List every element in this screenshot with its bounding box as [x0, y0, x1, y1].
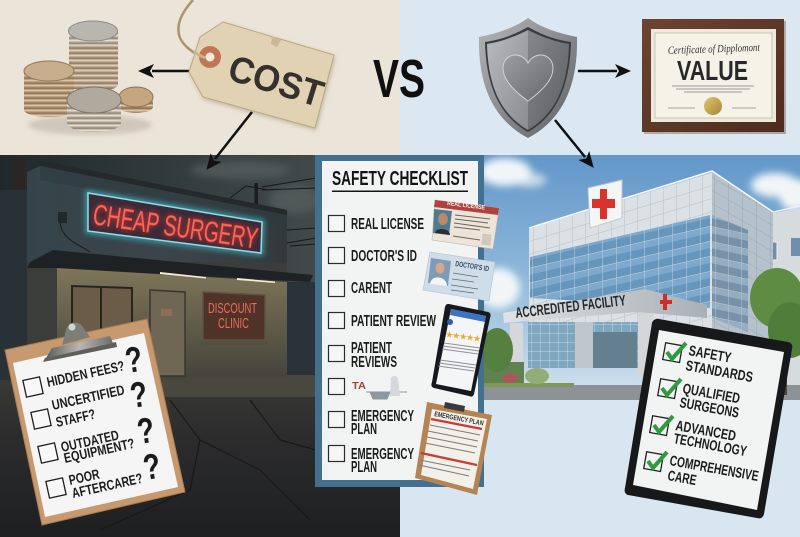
- checklist row: TA equipment icon: [328, 376, 407, 399]
- item: uncertified staff: STAFF?: [54, 406, 97, 430]
- item: safety standards: SAFETY: [687, 343, 733, 367]
- item: poor aftercare: [46, 445, 163, 501]
- item: uncertified staff: UNCERTIFIED: [50, 381, 126, 413]
- icon: shield with heart: [479, 18, 577, 138]
- neon sign: cheap surgery: [88, 193, 262, 255]
- item: hidden fees: [23, 338, 145, 397]
- checklist row: emergency plan one: EMERGENCY: [351, 408, 414, 425]
- arrow: cost to cheap surgery: [215, 112, 252, 159]
- checklist row: TA equipment icon: TA: [352, 381, 366, 392]
- neon sign: cheap surgery: CHEAP SURGERY: [91, 199, 260, 255]
- item: qualified surgeons: [658, 379, 741, 422]
- neon sign: discount clinic: [201, 292, 267, 345]
- heart: [503, 55, 553, 101]
- checklist row: emergency plan two: PLAN: [351, 459, 377, 476]
- window: [72, 286, 132, 352]
- item: outdated equipment: EQUIPMENT?: [62, 435, 136, 466]
- item: poor aftercare: ?: [140, 445, 163, 488]
- icon: real license card: REAL LICENSE: [447, 200, 486, 212]
- item: qualified surgeons: QUALIFIED: [681, 381, 741, 407]
- small stack: [119, 87, 153, 113]
- item: comprehensive care: CARE: [666, 468, 698, 489]
- icon: emergency plan clipboard: [415, 402, 492, 495]
- item: poor aftercare: AFTERCARE?: [70, 470, 144, 501]
- icon: coin stacks: [24, 21, 153, 135]
- checklist row: doctor's ID: DOCTOR'S ID: [351, 248, 417, 265]
- checklist row: emergency plan two: EMERGENCY: [351, 446, 414, 463]
- item: advanced technology: TECHNOLOGY: [672, 431, 748, 460]
- checklist title: SAFETY CHECKLIST: [332, 168, 468, 190]
- asphalt ground: [0, 375, 400, 537]
- clinic building: [0, 160, 316, 380]
- item: comprehensive care: COMPREHENSIVE: [668, 453, 760, 485]
- neon sign: discount clinic: DISCOUNT: [208, 300, 257, 317]
- red cross sign: [588, 180, 622, 228]
- checklist row: patient reviews: PATIENT: [351, 340, 392, 357]
- item: advanced technology: ADVANCED: [674, 418, 737, 445]
- icon: phone with reviews: [431, 304, 491, 397]
- hospital building: [529, 171, 800, 400]
- checklist row: real license: [328, 216, 424, 233]
- heading: VS: VS: [373, 49, 425, 109]
- entrance: [481, 268, 800, 400]
- arrow: shield to value: [578, 70, 617, 72]
- item: outdated equipment: [38, 409, 157, 466]
- neon sign: discount clinic: CLINIC: [218, 315, 249, 332]
- certificate: value: [642, 19, 786, 134]
- door: [150, 290, 185, 376]
- item: hidden fees: ?: [122, 338, 145, 381]
- item: qualified surgeons: SURGEONS: [678, 395, 740, 422]
- checklist row: patient review: PATIENT REVIEW: [351, 313, 436, 330]
- icon: phone with reviews: ★★★★★: [445, 329, 482, 344]
- item: safety standards: [663, 343, 754, 386]
- tall stack: [68, 21, 118, 92]
- checklist row: emergency plan two: [328, 446, 414, 476]
- neon sign: cheap surgery: CHEAP SURGERY: [91, 199, 260, 255]
- checklist row: carent: CARENT: [351, 280, 392, 297]
- clipboard: hidden risks: [5, 319, 185, 525]
- item: advanced technology: [650, 416, 748, 460]
- checklist title: [332, 168, 468, 192]
- item: safety standards: STANDARDS: [684, 358, 754, 386]
- accredited facility canopy: ACCREDITED FACILITY: [514, 292, 627, 322]
- left stack: [24, 61, 74, 117]
- panel: safety checklist: [315, 155, 484, 487]
- icon: emergency plan clipboard: EMERGENCY PLAN: [434, 411, 484, 428]
- icon: doctor's ID card: DOCTOR'S ID: [455, 259, 490, 273]
- checklist row: patient review: [328, 312, 436, 330]
- background: value band: [400, 0, 800, 156]
- icon: doctor's ID card: [423, 252, 495, 301]
- item: outdated equipment: OUTDATED: [59, 427, 120, 455]
- icon: price tag: [178, 0, 335, 130]
- panel: hospital scene: [476, 155, 800, 400]
- background: lower value area: [400, 395, 800, 537]
- clouds: [476, 158, 800, 308]
- clipboard clip: [43, 323, 117, 362]
- front stack: [67, 87, 121, 132]
- icon: price tag: COST: [224, 47, 329, 115]
- item: hidden fees: HIDDEN FEES?: [45, 357, 126, 390]
- checklist row: real license: REAL LICENSE: [351, 216, 424, 233]
- utility pole and wires: [13, 158, 316, 358]
- night clouds: [190, 161, 321, 214]
- item: uncertified staff: [31, 373, 150, 430]
- checklist row: emergency plan one: PLAN: [351, 421, 377, 438]
- background: cost band: [0, 0, 400, 156]
- arrow: shield to accredited facility: [555, 120, 585, 157]
- checklist row: doctor's ID: [328, 248, 417, 265]
- item: outdated equipment: ?: [134, 409, 157, 452]
- certificate: value: Certificate of Dipplomont: [668, 42, 761, 57]
- panel: cheap surgery scene: [0, 155, 400, 537]
- checklist row: emergency plan one: [328, 408, 414, 438]
- checklist row: patient reviews: REVIEWS: [351, 354, 397, 371]
- checklist row: carent: [328, 280, 392, 297]
- arrow: cost to coins: [152, 70, 189, 72]
- item: poor aftercare: POOR: [67, 466, 101, 488]
- tablet: accredited qualities: [625, 319, 792, 518]
- checklist row: patient reviews: [328, 340, 397, 371]
- certificate: value: VALUE: [677, 55, 748, 86]
- icon: real license card: [432, 200, 499, 249]
- item: comprehensive care: [644, 452, 760, 489]
- lights: [160, 272, 206, 278]
- item: uncertified staff: ?: [127, 373, 150, 416]
